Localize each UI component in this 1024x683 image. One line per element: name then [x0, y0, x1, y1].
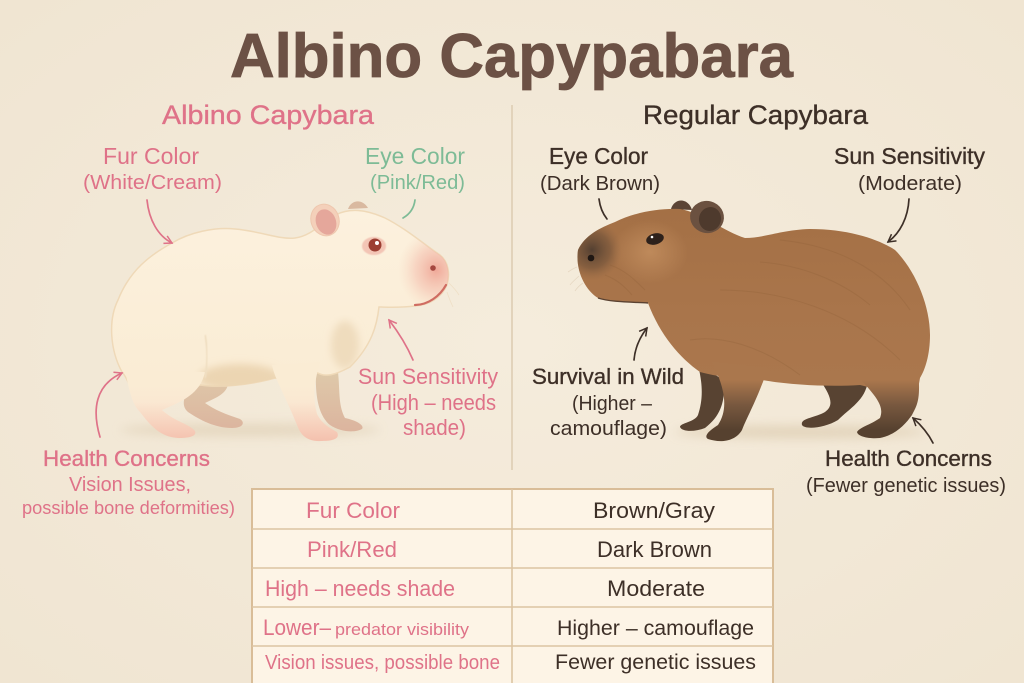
label: health concerns: Health Concerns	[43, 446, 210, 471]
heading: albino capybara: Albino Capybara	[162, 100, 375, 130]
title: Albino Capypabara	[230, 22, 794, 91]
label: eye color: (Dark Brown)	[540, 173, 660, 195]
label: eye color	[365, 143, 465, 194]
label: sun sensitivity	[834, 143, 985, 195]
arrow: sun sensitivity	[389, 320, 413, 360]
label: sun sensitivity: Sun Sensitivity	[358, 364, 498, 389]
row: eye color	[307, 537, 712, 562]
label: health concerns	[806, 446, 1006, 497]
panel: regular capybara	[532, 100, 1006, 497]
divider: between panels	[511, 105, 513, 470]
heading: regular capybara: Regular Capybara	[643, 100, 869, 130]
illustration: albino capybara	[112, 200, 474, 441]
panel: albino capybara	[22, 100, 498, 518]
illustration: regular capybara	[562, 197, 930, 441]
arrow: eye color	[403, 200, 415, 218]
row: sun sensitivity	[265, 576, 705, 601]
row: health	[265, 651, 756, 674]
label: health concerns: Health Concerns	[825, 446, 992, 471]
row: sun sensitivity: Moderate	[607, 576, 705, 601]
row: health: Fewer genetic issues	[555, 651, 756, 674]
label: eye color: Eye Color	[549, 143, 648, 169]
label: health concerns: (Fewer genetic issues)	[806, 475, 1006, 497]
label: sun sensitivity: (Moderate)	[858, 173, 962, 195]
label: sun sensitivity: shade)	[403, 415, 466, 440]
arrow: eye color	[599, 199, 607, 219]
label: eye color	[540, 143, 660, 195]
arrow: fur color	[147, 200, 172, 243]
row: survival: predator visibility	[335, 620, 470, 639]
table: comparison	[252, 489, 773, 683]
label: survival in wild: camouflage)	[550, 418, 667, 440]
label: health concerns: Vision Issues,	[69, 474, 191, 496]
row: fur color: Brown/Gray	[593, 498, 715, 523]
row: health: Vision issues, possible bone	[265, 652, 500, 674]
arrow: survival in wild	[634, 328, 647, 360]
label: health concerns: possible bone deformities)	[22, 498, 235, 518]
label: survival in wild: Survival in Wild	[532, 364, 684, 389]
arrow: sun sensitivity	[888, 199, 909, 242]
label: sun sensitivity	[358, 364, 498, 440]
label: fur color	[83, 143, 222, 194]
row: survival: Higher – camouflage	[557, 617, 754, 640]
label: survival in wild	[532, 364, 684, 440]
arrow: health concerns	[96, 373, 122, 437]
label: fur color: Fur Color	[103, 143, 199, 169]
row: survival	[263, 615, 754, 640]
label: eye color: Eye Color	[365, 143, 465, 169]
row: survival: Lower–	[263, 615, 332, 640]
row: eye color: Pink/Red	[307, 537, 397, 562]
row: sun sensitivity: High – needs shade	[265, 576, 455, 601]
row: fur color	[306, 498, 715, 523]
label: eye color: (Pink/Red)	[370, 172, 465, 194]
label: health concerns	[22, 446, 235, 518]
label: survival in wild: (Higher –	[572, 393, 653, 415]
label: sun sensitivity: (High – needs	[371, 390, 496, 415]
arrow: health concerns	[913, 418, 933, 443]
label: fur color: (White/Cream)	[83, 172, 222, 194]
label: sun sensitivity: Sun Sensitivity	[834, 143, 985, 169]
row: fur color: Fur Color	[306, 498, 400, 523]
row: eye color: Dark Brown	[597, 537, 712, 562]
